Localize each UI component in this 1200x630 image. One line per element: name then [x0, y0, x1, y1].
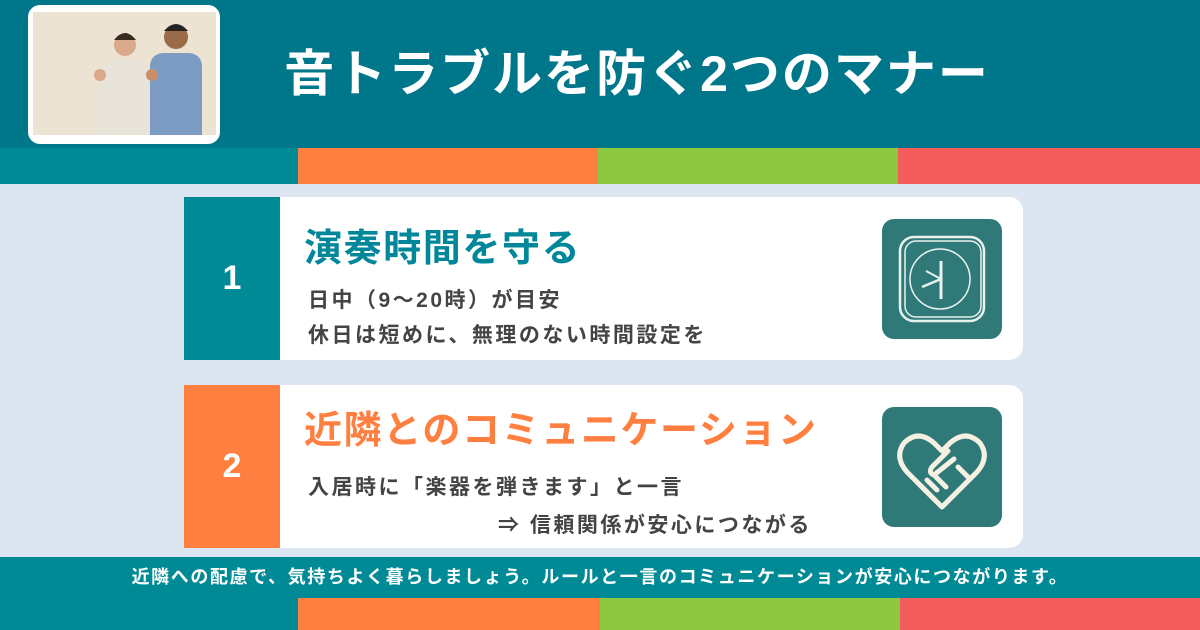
number 1: 1	[223, 259, 241, 297]
color stripe bottom	[0, 598, 1200, 630]
card 2	[184, 385, 1023, 548]
heading 2: 近隣とのコミュニケーション	[304, 410, 818, 452]
title: 音トラブルを防ぐ2つのマナー	[284, 46, 990, 102]
number 1	[184, 197, 280, 360]
footer message	[0, 557, 1200, 598]
icon: handshake heart	[882, 407, 1002, 527]
number 2: 2	[223, 447, 241, 485]
text 2: 入居時に「楽器を弾きます」と一言	[308, 476, 684, 499]
text 1	[308, 288, 707, 347]
header	[0, 0, 1200, 148]
color stripe top	[0, 148, 1200, 184]
photo	[28, 5, 220, 144]
card 1	[184, 197, 1023, 360]
footer message: 近隣への配慮で、気持ちよく暮らしましょう。ルールと一言のコミュニケーションが安心につながります。	[132, 567, 1068, 587]
text 1: 日中（9〜20時）が目安	[308, 289, 562, 312]
text 1: 休日は短めに、無理のない時間設定を	[308, 324, 707, 347]
text 2b: ⇒ 信頼関係が安心につながる	[498, 514, 812, 537]
icon: clock	[882, 219, 1002, 339]
heading 1: 演奏時間を守る	[304, 228, 581, 270]
number 2	[184, 385, 280, 548]
